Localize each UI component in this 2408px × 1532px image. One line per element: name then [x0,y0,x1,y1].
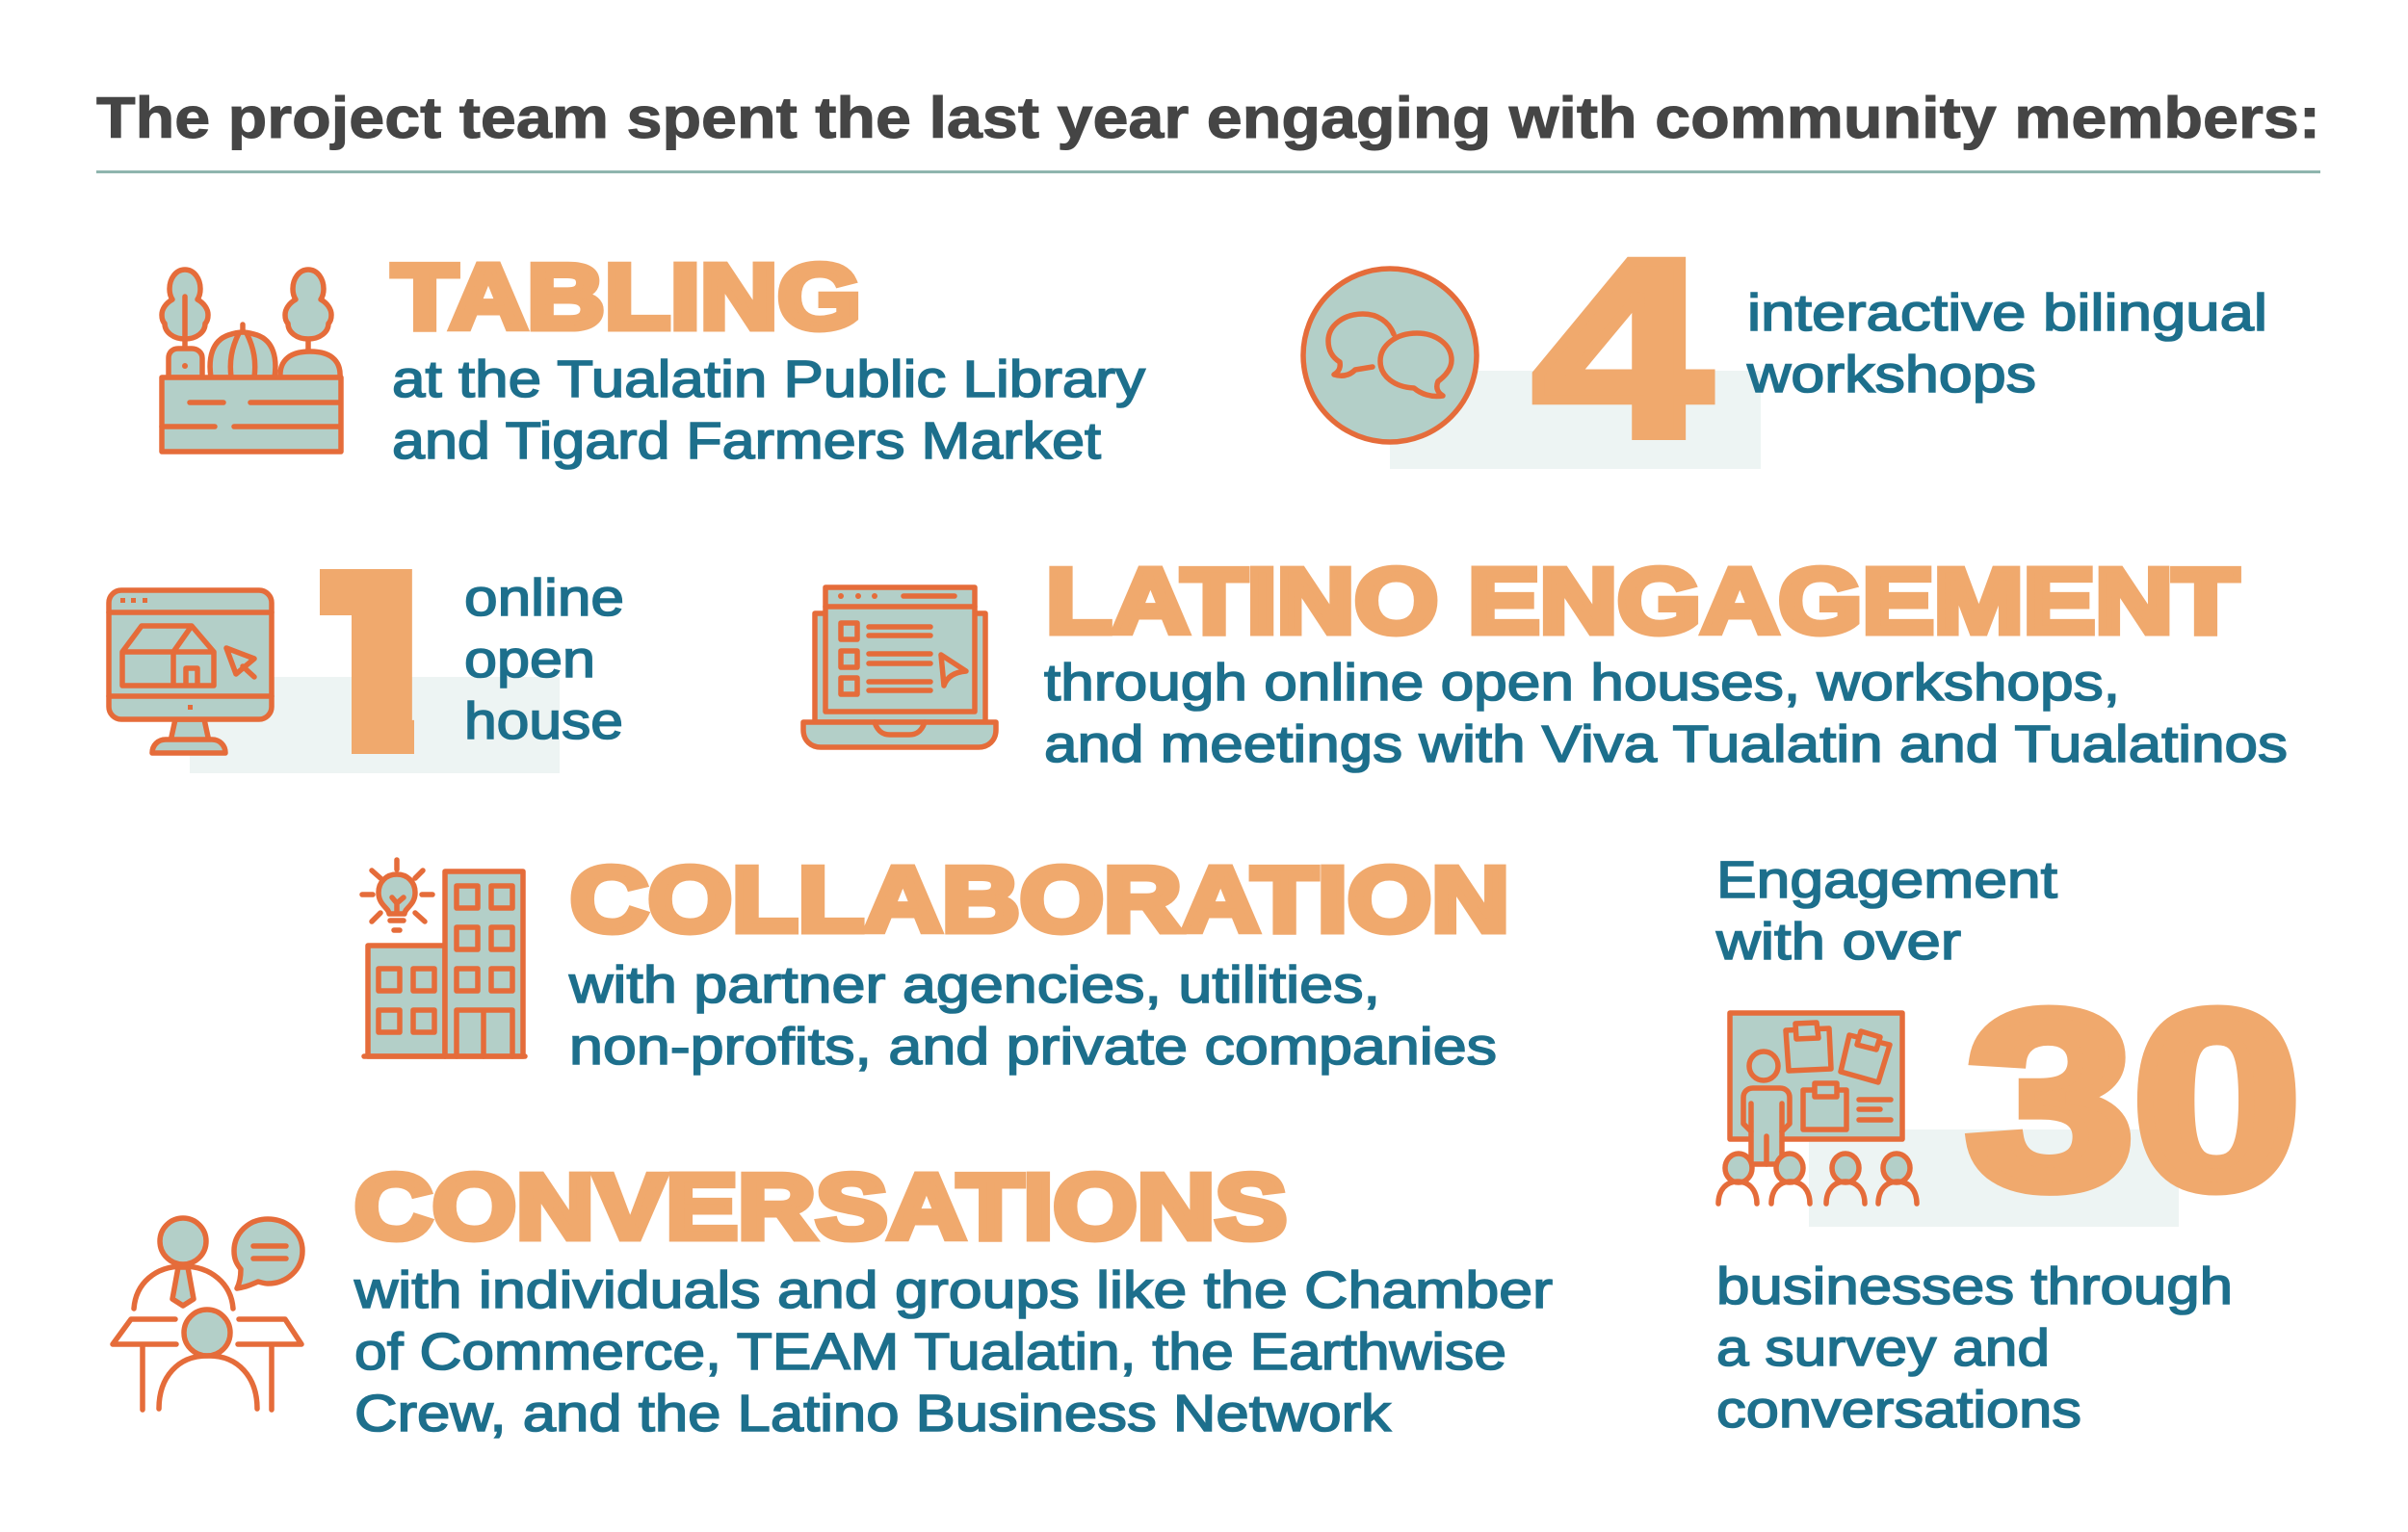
description: online open house: house [464,692,623,750]
icon: market crate with produce and trees [162,270,341,452]
icon: two people talking at a desk [113,1218,302,1410]
number backdrop [190,677,560,773]
heading: tabling: TABLING [392,246,861,349]
description: businesses through survey [1716,1258,2233,1439]
icon: desktop monitor with house [109,590,272,753]
description: collaboration: non-profits, and private companies [569,1018,1497,1076]
description: conversations: of Commerce, TEAM Tualatin, the Earthwise [354,1323,1506,1381]
panel: 4 workshops [1303,207,2267,489]
icon: laptop with checklist [803,587,996,747]
panel: tabling [162,246,1145,470]
panel: 30 businesses [1715,851,2300,1439]
title: The project team spent the last year engaging with community members: [96,86,2320,150]
description: workshops: workshops [1746,346,2036,403]
number backdrop [1390,371,1761,469]
big number 30: 30 [1967,961,2300,1240]
icon: office buildings with light bulb [362,860,525,1056]
description: conversations [353,1261,1553,1442]
number backdrop [1809,1130,2179,1227]
description: conversations: with individuals and groups like the Chamber [353,1261,1553,1319]
description: businesses through survey: businesses through [1716,1258,2233,1315]
description: latino engagement: and meetings with Viva Tualatin and Tualatinos [1044,715,2288,773]
icon: speech bubbles in circle [1303,269,1477,442]
panel: 1 online open house [106,569,622,773]
description: workshops [1746,284,2267,403]
description: latino engagement: through online open houses, workshops, [1044,654,2120,712]
heading: latino engagement: LATINO ENGAGEMENT [1046,550,2238,653]
panel: collaboration [362,848,1509,1076]
big number 4: 4 [1533,207,1713,489]
description: conversations: Crew, and the Latino Business Network [354,1385,1392,1442]
heading: collaboration: COLLABORATION [570,848,1509,951]
big number 1 [320,569,414,754]
heading: conversations: CONVERSATIONS [354,1155,1287,1259]
panel: latino engagement [803,550,2288,773]
description: tabling [392,351,1145,470]
description: collaboration: with partner agencies, utilities, [568,956,1380,1014]
description: online open house [464,569,624,750]
description: businesses through survey: conversations [1716,1381,2081,1439]
description: latino engagement [1044,654,2288,773]
description: online open house: open [464,631,595,688]
description: workshops: interactive bilingual [1747,284,2267,342]
description: tabling: and Tigard Farmers Market [392,412,1101,470]
description: collaboration [568,956,1497,1076]
icon: presenter at board with audience [1718,1013,1917,1204]
description: engagement with over: with over [1715,913,1961,971]
big number 1: 1 [251,509,483,810]
description: online open house: online [464,569,624,627]
description: tabling: at the Tualatin Public Library [392,351,1145,408]
description: engagement with over [1715,851,2057,971]
description: businesses through survey: a survey and [1716,1319,2050,1377]
panel: conversations [113,1155,1553,1442]
description: engagement with over: Engagement [1716,851,2057,909]
